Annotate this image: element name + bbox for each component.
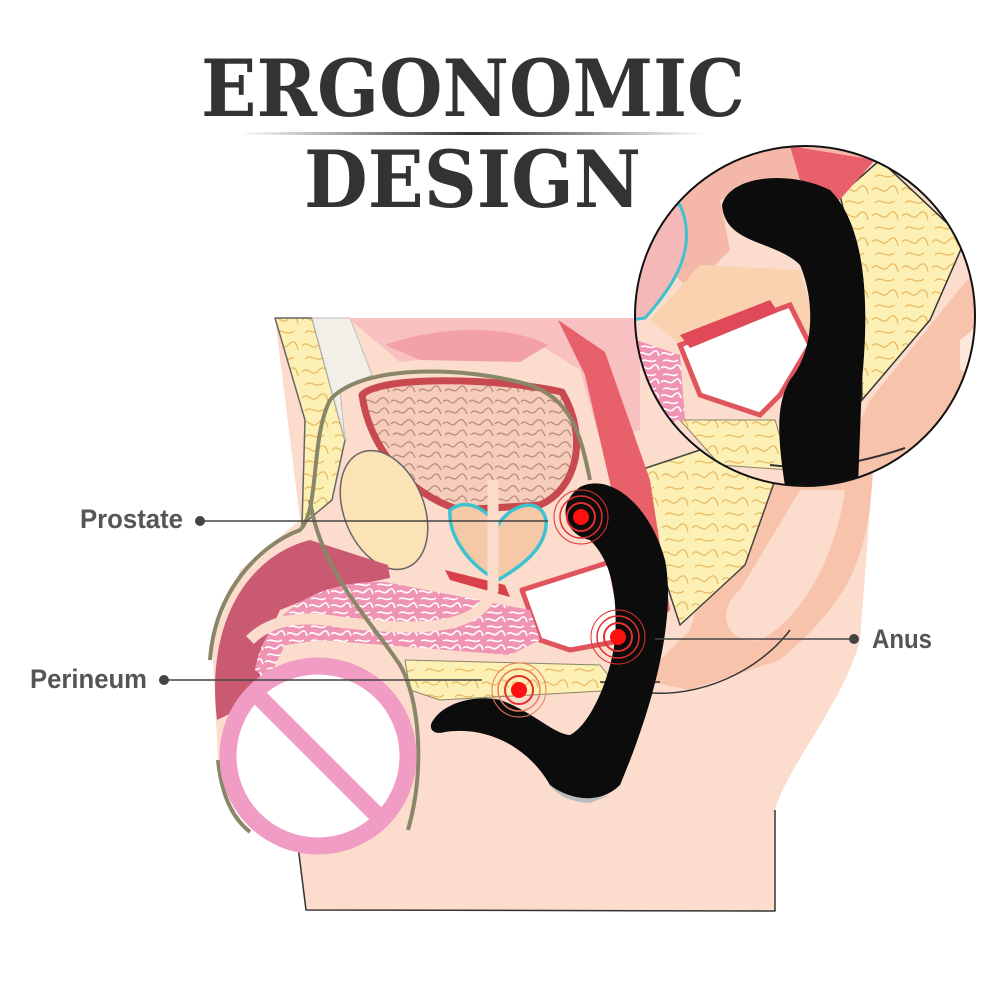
label: Prostate bbox=[80, 504, 548, 534]
inset: soft tissue bbox=[636, 340, 685, 425]
lower contour bbox=[296, 630, 790, 911]
label: Perineum: Perineum bbox=[30, 664, 147, 694]
inset: back tissue bbox=[858, 277, 974, 476]
inset: fat layer bbox=[840, 160, 965, 400]
label: Prostate: Prostate bbox=[80, 504, 183, 534]
inset: lower fat bbox=[680, 420, 790, 470]
body silhouette bbox=[212, 318, 873, 911]
pressure point: anus bbox=[591, 610, 645, 664]
right fat layer bbox=[640, 450, 775, 625]
penile shaft bbox=[215, 540, 390, 720]
inset: red band bbox=[680, 300, 778, 348]
title: ERGONOMIC bbox=[201, 42, 745, 135]
device button bbox=[548, 782, 610, 803]
title: DESIGN bbox=[304, 133, 641, 226]
anatomy illustration bbox=[210, 318, 873, 911]
urethra bbox=[250, 480, 493, 640]
pelvic floor bbox=[522, 562, 625, 650]
magnified inset bbox=[630, 146, 985, 490]
back highlight bbox=[726, 490, 845, 640]
inset: upper tissue bbox=[676, 147, 866, 284]
inset: contour bbox=[770, 448, 905, 468]
label: Anus: Anus bbox=[872, 624, 932, 654]
bladder bbox=[362, 381, 577, 510]
inset: mid tissue bbox=[650, 265, 810, 343]
inset: prostate bbox=[636, 203, 688, 321]
inset: rectal wall bbox=[790, 147, 874, 201]
pressure point: prostate bbox=[554, 490, 608, 544]
front fat layer bbox=[275, 318, 345, 525]
inset: pelvic floor bbox=[680, 305, 810, 415]
rectal wall bbox=[558, 320, 670, 640]
label: Perineum bbox=[30, 664, 482, 694]
inset: back highlight bbox=[960, 329, 974, 372]
pressure point: perineum bbox=[492, 663, 546, 717]
loop outline bbox=[210, 371, 590, 832]
label: Anus bbox=[655, 624, 932, 654]
title bbox=[201, 42, 745, 226]
pubic bone bbox=[324, 438, 444, 582]
black ergonomic device bbox=[431, 483, 668, 798]
perineal fat bbox=[405, 660, 620, 700]
inset: device bbox=[722, 178, 865, 486]
censor mark bbox=[228, 666, 408, 846]
back tissue bbox=[640, 470, 873, 690]
connective tissue bbox=[312, 318, 372, 440]
upper tissue bbox=[348, 318, 640, 440]
prostate bbox=[450, 505, 546, 580]
